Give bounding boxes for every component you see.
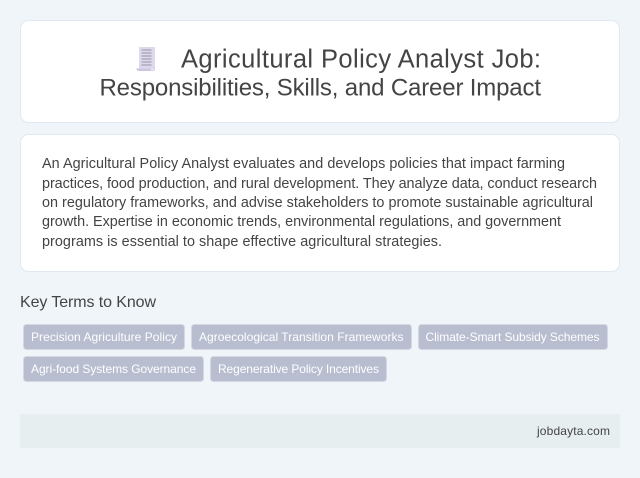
tag: agroecological transition frameworks: Agroecological Transition Frameworks (199, 330, 404, 344)
tag: regenerative policy incentives: Regenerative Policy Incentives (218, 362, 379, 376)
tag: climate-smart subsidy schemes (418, 324, 608, 350)
tag: agroecological transition frameworks (192, 324, 412, 350)
tag list (24, 324, 608, 382)
title: Responsibilities, Skills, and Career Impact (100, 74, 541, 102)
title: Agricultural Policy Analyst Job: (181, 46, 541, 74)
tag: precision agriculture policy: Precision Agriculture Policy (31, 330, 177, 344)
text block: description: practices, food production, and rural development. They analyze data, conduct research (42, 176, 597, 192)
footer bar (20, 414, 620, 448)
tag: agri-food systems governance (24, 356, 204, 382)
text block: description: An Agricultural Policy Analyst evaluates and develops policies that impact farming (42, 156, 565, 172)
text block: description (42, 156, 597, 250)
text block: description: programs is essential to shape effective agricultural strategies. (42, 234, 442, 250)
text block: description: growth. Expertise in economic trends, environmental regulations, and government (42, 214, 561, 230)
icon: document scroll (136, 47, 155, 71)
tag: precision agriculture policy (24, 324, 184, 350)
panel: description card (20, 134, 620, 272)
tag: climate-smart subsidy schemes: Climate-Smart Subsidy Schemes (426, 330, 600, 344)
panel: title card (20, 20, 620, 122)
tag: agri-food systems governance: Agri-food Systems Governance (31, 362, 196, 376)
heading: key terms: Key Terms to Know (20, 294, 156, 311)
tag: regenerative policy incentives (210, 356, 386, 382)
footer source text: jobdayta.com (536, 424, 610, 438)
text block: description: on regulatory frameworks, and advise stakeholders to promote sustainable agricultural (42, 195, 593, 211)
title (100, 46, 541, 102)
